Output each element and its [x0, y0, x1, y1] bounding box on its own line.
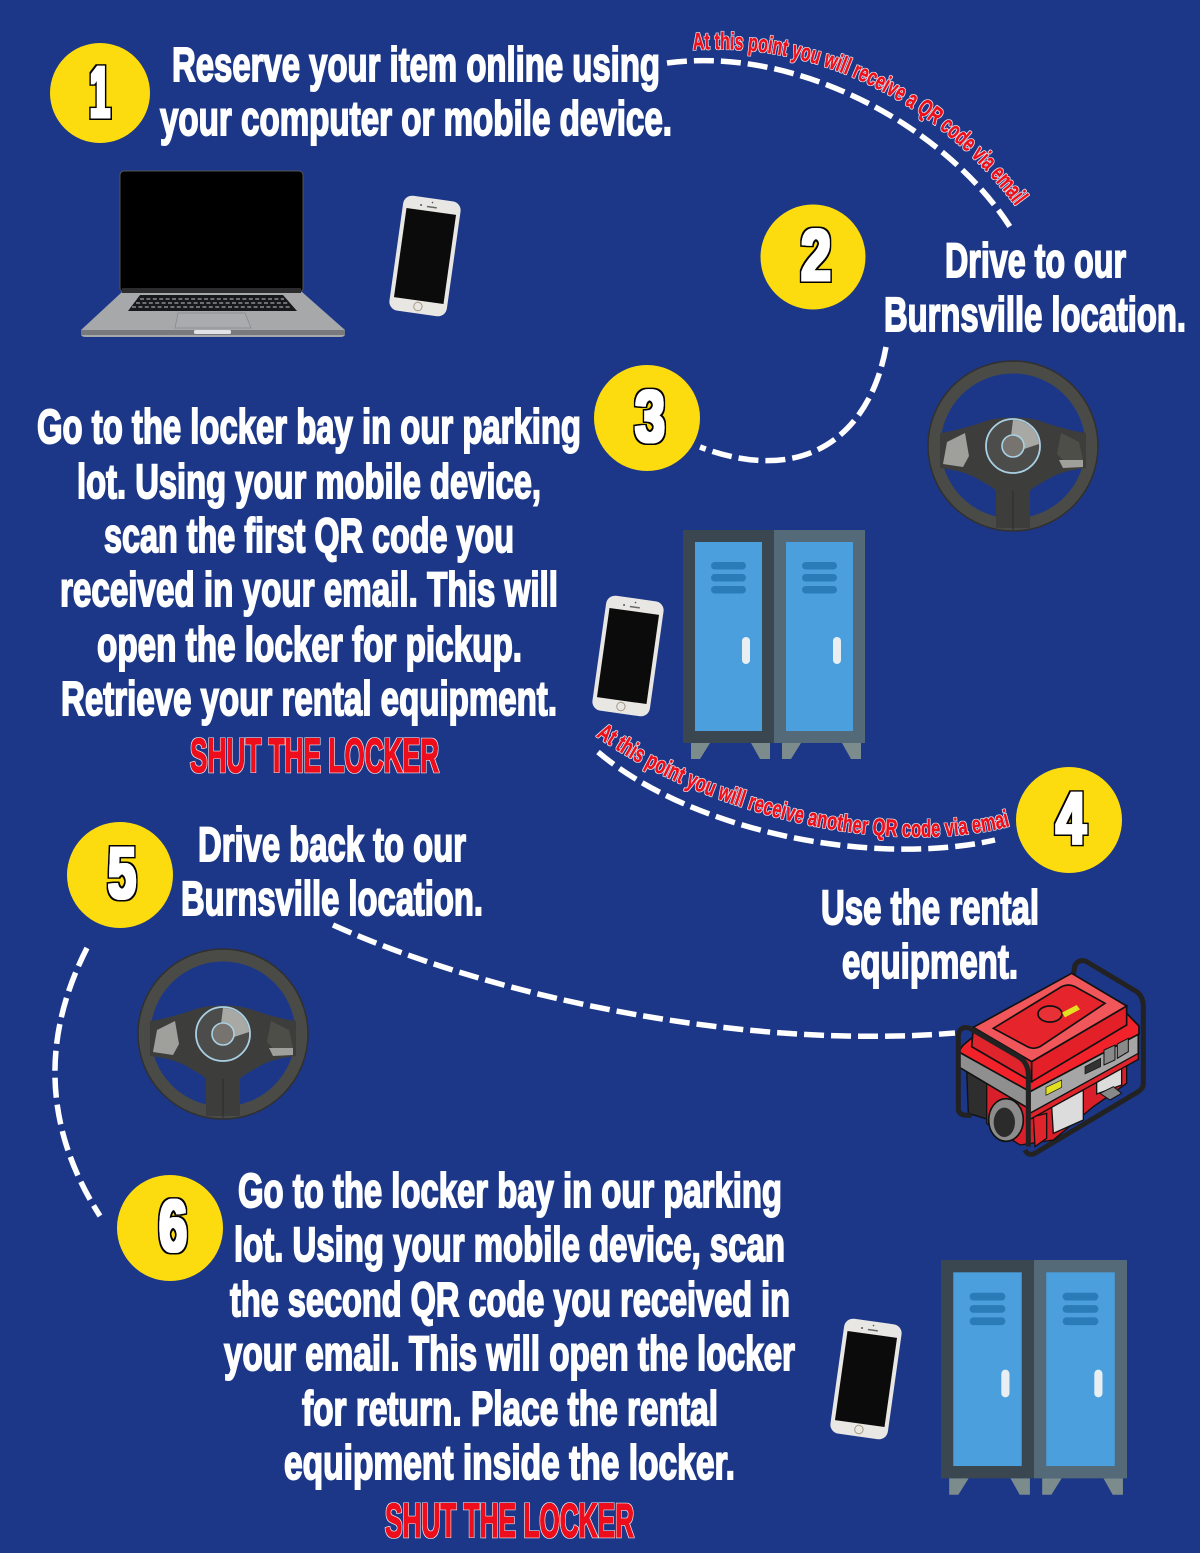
- badge 1: 1: [90, 53, 110, 133]
- step 3 text: received in your email. This will: [60, 564, 558, 617]
- step 5 panel: [67, 819, 483, 1119]
- badge 4: [1016, 767, 1122, 873]
- step 3 text: open the locker for pickup.: [97, 619, 522, 672]
- icon: phone: [388, 195, 462, 317]
- step 2 panel: [760, 204, 1186, 531]
- badge 3: [594, 365, 700, 471]
- step 3 text: Retrieve your rental equipment.: [61, 673, 557, 726]
- dashed arrow: step 2 to step 3: [700, 347, 886, 461]
- icon: laptop: [81, 171, 345, 337]
- step 6 text: the second QR code you received in: [230, 1274, 790, 1327]
- warning: shut the locker: SHUT THE LOCKER: [190, 730, 439, 783]
- icon: generator: [958, 961, 1143, 1154]
- step 6 text: equipment inside the locker.: [284, 1437, 735, 1490]
- curved note: first QR code: At this point you will receive a QR code via email: [692, 30, 1030, 206]
- step 3 panel: [37, 365, 865, 783]
- icon: steering wheel: [928, 361, 1098, 531]
- dashed arrow: step 1 to step 2: [667, 61, 1012, 230]
- badge 2: [760, 204, 866, 310]
- curved note: second QR code: At this point you will receive another QR code via email: [595, 724, 1010, 841]
- icon: lockers: [683, 530, 865, 759]
- dashed arrow: step 4 to step 5: [333, 925, 955, 1036]
- step 1 text: your computer or mobile device.: [160, 93, 672, 146]
- step 6 text: [224, 1165, 795, 1490]
- dashed arrow: step 5 to step 6: [55, 948, 100, 1216]
- step 4 text: Use the rental: [821, 882, 1039, 935]
- step 3 text: Go to the locker bay in our parking: [37, 401, 581, 454]
- dashed arrow: step 3 to step 4: [598, 752, 995, 849]
- step 1 panel: [50, 39, 672, 337]
- step 5 text: [181, 819, 483, 926]
- badge 4: 4: [1056, 779, 1086, 859]
- step 6 panel: [117, 1165, 1127, 1548]
- step 3 text: [37, 401, 581, 726]
- step 4 text: [821, 882, 1039, 989]
- step 1 text: Reserve your item online using: [172, 39, 660, 92]
- step 4 text: equipment.: [842, 936, 1018, 989]
- step 6 text: Go to the locker bay in our parking: [238, 1165, 782, 1218]
- icon: steering wheel: [138, 949, 308, 1119]
- badge 6: [117, 1175, 223, 1281]
- icon: lockers: [941, 1260, 1127, 1495]
- badge 3: 3: [635, 377, 665, 457]
- warning: shut the locker: SHUT THE LOCKER: [385, 1495, 634, 1548]
- step 3 text: scan the first QR code you: [104, 510, 514, 563]
- badge 5: [67, 822, 173, 928]
- badge 6: 6: [159, 1187, 187, 1267]
- icon: phone: [591, 595, 665, 717]
- step 6 text: for return. Place the rental: [302, 1383, 718, 1436]
- step 5 text: Burnsville location.: [181, 873, 483, 926]
- step 6 text: your email. This will open the locker: [224, 1328, 795, 1381]
- icon: phone: [829, 1318, 903, 1440]
- step 3 text: lot. Using your mobile device,: [77, 456, 541, 509]
- step 4 panel: [821, 767, 1143, 1154]
- step 6 text: lot. Using your mobile device, scan: [234, 1219, 785, 1272]
- step 2 text: [884, 235, 1186, 342]
- badge 1: [50, 43, 150, 143]
- badge 2: 2: [801, 216, 831, 296]
- badge 5: 5: [108, 834, 136, 914]
- step 5 text: Drive back to our: [198, 819, 466, 872]
- step 1 text: [160, 39, 672, 146]
